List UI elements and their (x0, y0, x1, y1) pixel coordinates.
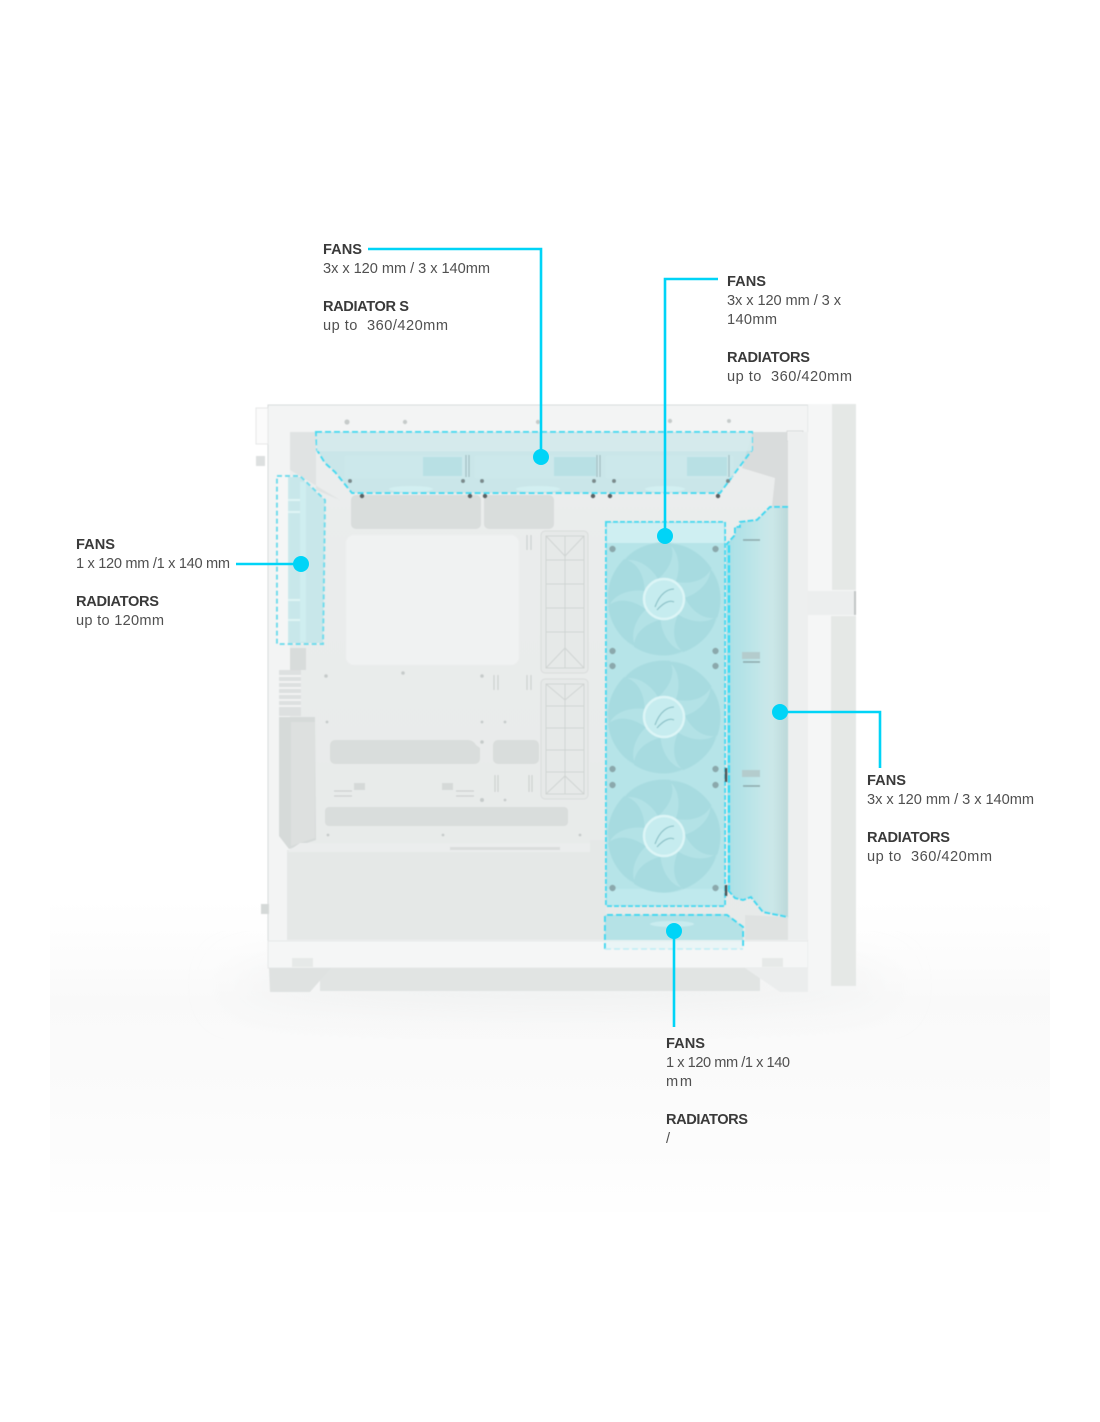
front callout text: FANS (727, 274, 766, 290)
left tab (256, 408, 268, 444)
cable cutout large (346, 535, 519, 665)
front callout text: 140mm (727, 312, 777, 328)
callout: front (657, 279, 718, 544)
front callout text (727, 274, 852, 385)
top callout text: FANS (323, 242, 362, 258)
PSU shroud (287, 850, 590, 940)
grille panel lower (541, 679, 588, 799)
right foot (745, 968, 808, 992)
top callout text (323, 242, 490, 334)
left foot (269, 968, 331, 992)
zone: side fans (726, 507, 788, 917)
top fan blades (345, 456, 733, 478)
bottom callout text: FANS (666, 1036, 705, 1052)
top callout text: up to 360/420mm (323, 318, 448, 334)
top rail screws (344, 419, 350, 425)
zone: rear fan (277, 476, 325, 644)
front panel (808, 404, 856, 990)
PC case (256, 404, 856, 992)
bottom callout text: mm (666, 1074, 692, 1090)
callout: rear (236, 556, 309, 572)
fan 2 (595, 650, 728, 785)
fan 1 (595, 532, 728, 667)
callout: bottom (666, 923, 682, 1027)
standoff marks (334, 535, 532, 796)
grille panel upper (541, 531, 588, 673)
top recess panels (351, 495, 481, 529)
underside shadow (320, 968, 760, 991)
rear callout text: up to 120mm (76, 613, 164, 629)
bottom callout text: / (666, 1131, 671, 1147)
fan 3 (595, 769, 728, 904)
front callout text: RADIATORS (727, 350, 810, 366)
zone: bottom fan (605, 914, 743, 949)
top callout text: 3x x 120 mm / 3 x 140mm (323, 261, 490, 277)
case outer frame (268, 405, 808, 968)
rear callout text: RADIATORS (76, 594, 159, 610)
inner cavity (290, 432, 788, 940)
side callout text: 3x x 120 mm / 3 x 140mm (867, 792, 1034, 808)
zone: front fans (595, 522, 728, 906)
bottom callout text (666, 1036, 790, 1147)
background floor shadow (50, 900, 1050, 1212)
rear callout text: 1 x 120 mm /1 x 140 mm (76, 556, 230, 572)
side callout text: up to 360/420mm (867, 849, 992, 865)
left vents (279, 670, 301, 716)
motherboard cutouts (330, 740, 480, 764)
callout: side (772, 704, 880, 768)
rear callout text: FANS (76, 537, 115, 553)
right inner column (788, 432, 808, 940)
left mesh (279, 717, 316, 849)
side callout text (867, 773, 1034, 865)
top callout text: RADIATOR S (323, 299, 409, 315)
side callout text: FANS (867, 773, 906, 789)
bottom callout text: 1 x 120 mm /1 x 140 (666, 1055, 790, 1071)
bottom callout text: RADIATORS (666, 1112, 748, 1128)
rear callout text (76, 537, 230, 629)
front callout text: up to 360/420mm (727, 369, 852, 385)
callout: top (368, 249, 549, 465)
zone: top fans (316, 432, 752, 498)
base rail (268, 941, 808, 968)
front callout text: 3x x 120 mm / 3 x (727, 293, 842, 309)
side callout text: RADIATORS (867, 830, 950, 846)
